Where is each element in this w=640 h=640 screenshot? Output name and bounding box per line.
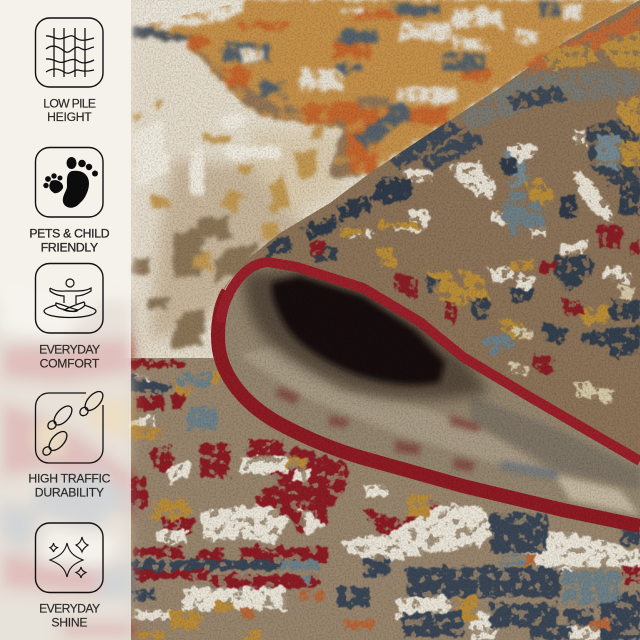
label: pets and child friendly: FRIENDLY: [41, 240, 98, 254]
icon: paw and footprint: [36, 148, 103, 217]
orange medallion: [131, 0, 640, 178]
feature: everyday shine: [36, 523, 103, 629]
medallion mottling: [131, 0, 640, 180]
red binding lower edge: [218, 292, 640, 526]
floor pattern: [127, 358, 640, 640]
label: low pile height: LOW PILE: [43, 96, 96, 110]
label: everyday comfort: EVERYDAY: [39, 342, 100, 356]
label: high traffic durability: DURABILITY: [35, 486, 104, 500]
label: low pile height: HEIGHT: [47, 110, 92, 124]
icon: sparkles: [36, 523, 103, 592]
label: pets and child friendly: PETS & CHILD: [29, 226, 109, 240]
roll mottling: [224, 3, 640, 405]
label: everyday shine: EVERYDAY: [39, 601, 100, 615]
icon: meditating figure: [36, 264, 103, 333]
translucent sidebar panel: [0, 0, 131, 640]
label: high traffic durability: HIGH TRAFFIC: [28, 472, 110, 486]
icon: pile fibres: [36, 18, 103, 87]
label: everyday comfort: COMFORT: [40, 356, 100, 370]
floor mottling: [130, 358, 640, 640]
feature: pets and child friendly: [29, 148, 110, 254]
feature: high traffic durability: [28, 388, 111, 500]
roll top face: [224, 0, 640, 456]
faded rug colours beneath panel: [0, 0, 131, 640]
feature: low pile height: [36, 18, 103, 124]
hollow halo: [244, 268, 490, 399]
feature: everyday comfort: [36, 264, 103, 370]
hollow core: [272, 276, 445, 385]
label: everyday shine: SHINE: [51, 615, 87, 629]
icon: shoe prints: [36, 388, 106, 463]
underside of rug and dark hollow: [225, 267, 640, 527]
red binding top edge: [220, 262, 640, 461]
knit texture: [131, 0, 640, 640]
